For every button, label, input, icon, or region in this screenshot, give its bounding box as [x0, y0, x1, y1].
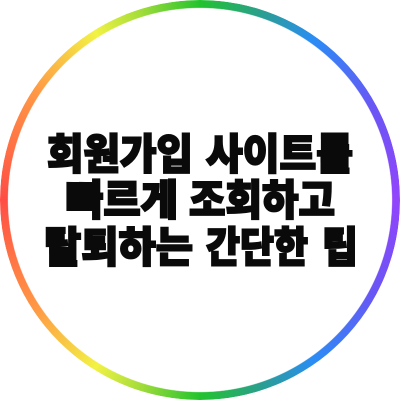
title line 1	[47, 131, 353, 178]
title line 2	[66, 177, 335, 224]
title line 2: 빠르게	[66, 177, 178, 224]
title line 1: 사이트를	[206, 131, 353, 178]
title line 3: 팁	[322, 224, 358, 271]
title line 2: 조회하고	[189, 177, 335, 224]
title line 1: 회원가입	[47, 131, 193, 178]
title line 3: 탈퇴하는	[44, 224, 193, 271]
title line 3: 간단한	[206, 224, 308, 271]
title line 3	[44, 224, 358, 271]
